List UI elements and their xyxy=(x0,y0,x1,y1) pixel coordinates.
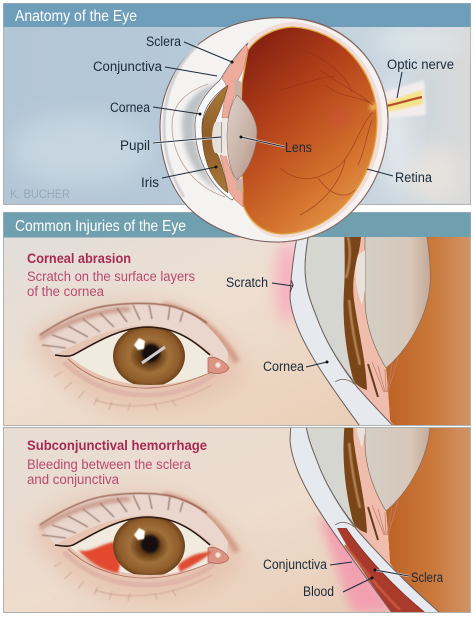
label: Sclera: Sclera xyxy=(146,34,181,49)
label: Optic nerve xyxy=(387,57,454,98)
heading: Common Injuries of the Eye xyxy=(4,212,470,238)
lens xyxy=(227,95,257,180)
label: Cornea xyxy=(110,100,202,116)
iris xyxy=(202,85,228,193)
heading: Anatomy of the Eye xyxy=(4,4,470,27)
cornea band xyxy=(195,43,248,200)
ciliary body lower xyxy=(220,155,243,207)
label: Lens xyxy=(240,136,312,155)
optic nerve xyxy=(377,80,426,118)
label: Sclera xyxy=(146,34,234,64)
pink glow xyxy=(318,515,395,612)
label: Cornea: Cornea xyxy=(110,100,150,115)
sclera shading xyxy=(182,80,222,192)
glow around globe xyxy=(381,75,409,195)
label: Pupil: Pupil xyxy=(120,138,150,153)
heading: Common Injuries of the Eye: Common Injuries of the Eye xyxy=(15,218,186,235)
eye with hemorrhage xyxy=(30,493,245,601)
heading: Anatomy of the Eye: Anatomy of the Eye xyxy=(15,8,137,25)
label: Iris: Iris xyxy=(141,175,159,190)
text block: Corneal abrasion: Corneal abrasion xyxy=(27,250,131,266)
pink glow xyxy=(276,240,300,324)
label: Blood: Blood xyxy=(303,584,334,599)
cornea cross-section with scratch xyxy=(290,237,470,425)
signature: K. BUCHER xyxy=(10,189,70,201)
pupil opening xyxy=(212,122,222,153)
label: Lens: Lens xyxy=(285,140,312,155)
panel: corneal abrasion xyxy=(28,237,470,425)
label: Conjunctiva (injury): Conjunctiva xyxy=(263,557,327,572)
label: Retina: Retina xyxy=(395,170,432,185)
panel: anatomy of the eye background xyxy=(4,4,470,205)
label: Scratch xyxy=(226,275,293,290)
cross-section with blood layer xyxy=(290,428,470,612)
text block: Subconjunctival hemorrhage: and conjunctiva xyxy=(27,472,119,487)
text block: Subconjunctival hemorrhage: Bleeding between the sclera xyxy=(27,457,191,472)
text block: Corneal abrasion: of the cornea xyxy=(27,284,104,299)
eye with scratch xyxy=(30,303,245,411)
anatomical eye cross-section xyxy=(93,18,454,242)
macula xyxy=(331,109,349,127)
retinal vessels xyxy=(280,50,373,215)
text block: Corneal abrasion: Scratch on the surface layers xyxy=(27,269,195,284)
text block: Subconjunctival hemorrhage: Subconjunctival hemorrhage xyxy=(27,437,207,453)
label: Conjunctiva: Conjunctiva xyxy=(93,59,162,74)
panel: subconjunctival hemorrhage xyxy=(3,427,471,613)
label: Sclera (injury) xyxy=(374,568,443,585)
label: Sclera (injury): Sclera xyxy=(411,570,443,585)
ciliary body upper xyxy=(222,44,248,118)
label: Iris xyxy=(141,166,218,190)
label: Cornea (injury): Cornea xyxy=(263,359,304,374)
text block: Subconjunctival hemorrhage xyxy=(27,437,207,487)
zonule wedges xyxy=(234,78,242,100)
text block: Corneal abrasion xyxy=(27,250,195,299)
label: Cornea (injury) xyxy=(263,359,328,374)
label: Optic nerve: Optic nerve xyxy=(387,57,454,72)
outer globe and conjunctiva xyxy=(160,18,388,242)
panel: common injuries of the eye xyxy=(4,212,470,426)
retina interior xyxy=(240,27,377,234)
label: Blood xyxy=(303,576,374,599)
label: Pupil xyxy=(120,137,221,153)
label: Retina xyxy=(367,169,432,185)
label: Conjunctiva xyxy=(93,59,217,76)
sclera wall xyxy=(243,22,382,238)
label: Scratch: Scratch xyxy=(226,275,268,290)
